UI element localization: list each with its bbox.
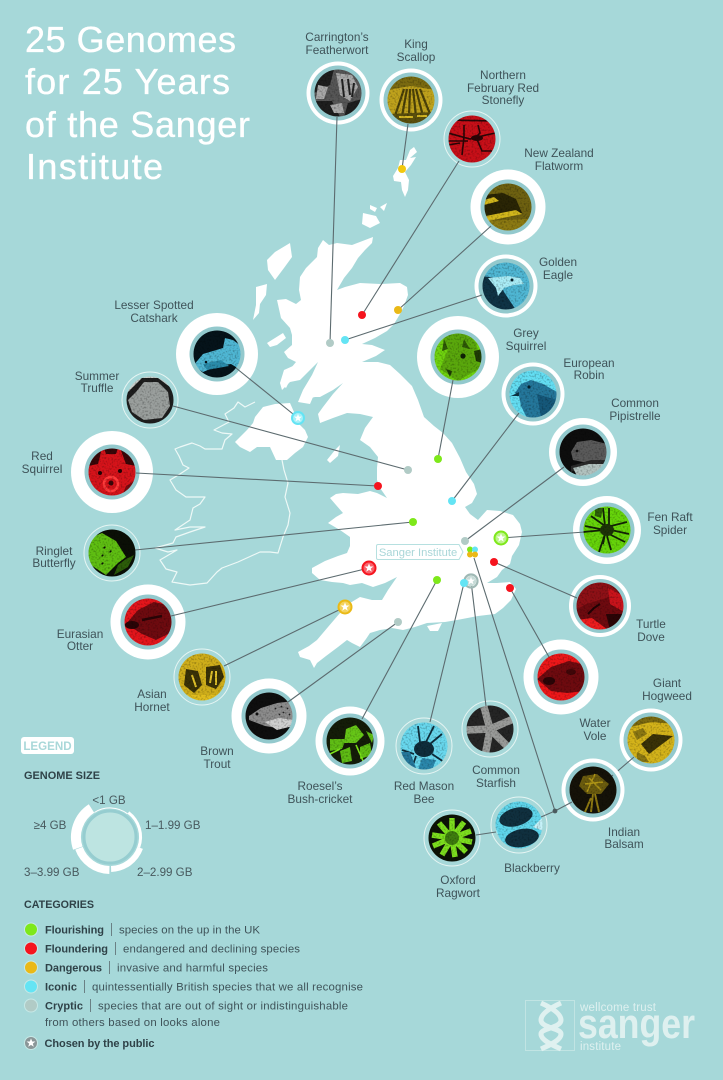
photo: [88, 448, 136, 496]
label: Red Mason: [394, 779, 454, 793]
species: New Zealand Flatworm: [394, 146, 594, 314]
category: dangerous: [24, 961, 268, 974]
species: Eurasian Otter: [57, 560, 376, 660]
genome size labels: [24, 794, 201, 879]
chosen by the public: Chosen by the public: [44, 1038, 154, 1050]
photo: [124, 598, 172, 646]
photo: [245, 692, 293, 740]
legend badge: LEGEND: [23, 740, 72, 753]
genome size labels: 2–2.99 GB: [137, 866, 193, 879]
map: islands: [253, 147, 442, 631]
photo: [88, 529, 136, 577]
heading: categories: CATEGORIES: [24, 899, 94, 911]
label: Robin: [574, 368, 604, 382]
photo: [466, 705, 514, 753]
logo text: sanger: [578, 1000, 695, 1047]
label: Ringlet: [36, 544, 73, 558]
Sanger Institute tag: Sanger Institute: [379, 547, 457, 559]
label: Common: [611, 396, 659, 410]
category: flourishing: [24, 923, 260, 936]
photo: [537, 653, 585, 701]
title: of the Sanger: [25, 104, 250, 145]
label: Brown: [200, 744, 234, 758]
label: Asian: [137, 687, 167, 701]
label: Summer: [75, 369, 119, 383]
photo: [193, 330, 241, 378]
category: cryptic: from others based on looks alone: [45, 1017, 220, 1029]
genome size labels: <1 GB: [92, 794, 126, 807]
species: European Robin: [448, 356, 615, 505]
label: Dove: [637, 630, 665, 644]
species: Ringlet Butterfly: [32, 518, 417, 581]
label: Squirrel: [506, 339, 546, 353]
label: Giant: [653, 676, 682, 690]
map: Northern Ireland: [235, 403, 308, 460]
label: Starfish: [476, 776, 516, 790]
species: Lesser Spotted Catshark: [114, 298, 305, 425]
photo: [434, 333, 482, 381]
species: Golden Eagle: [341, 254, 577, 344]
label: Featherwort: [306, 43, 369, 57]
category: flourishing: Flourishing: [45, 924, 104, 936]
category: iconic: Iconic: [45, 982, 77, 994]
label: Golden: [539, 255, 577, 269]
label: Water: [579, 716, 611, 730]
label: Eurasian: [57, 627, 103, 641]
map of UK and Ireland: [155, 147, 522, 668]
label: Common: [472, 763, 520, 777]
label: Hogweed: [642, 689, 692, 703]
species: Asian Hornet: [134, 600, 352, 714]
species: Indian Balsam: [555, 758, 644, 851]
species: King Scallop: [380, 37, 442, 173]
label: European: [563, 356, 615, 370]
title: Institute: [26, 146, 163, 187]
category: floundering: endangered and declining species: [123, 944, 300, 956]
species: Northern February Red Stonefly: [358, 68, 539, 319]
species: Turtle Dove: [490, 558, 666, 644]
heading: genome size: GENOME SIZE: [24, 770, 100, 782]
label: Eagle: [543, 268, 574, 282]
photo: [509, 370, 557, 418]
label: Northern: [480, 68, 526, 82]
photo: [400, 722, 448, 770]
species: Carrington's Featherwort: [305, 30, 370, 347]
photo: [126, 376, 174, 424]
label: Hornet: [134, 700, 170, 714]
label: Blackberry: [504, 861, 560, 875]
photo: [326, 717, 374, 765]
genome size labels: 1–1.99 GB: [145, 819, 201, 832]
label: Vole: [584, 729, 607, 743]
title: for 25 Years: [25, 61, 230, 102]
species: Common Starfish: [462, 574, 520, 790]
photo: [482, 262, 530, 310]
label: Roesel’s: [297, 779, 343, 793]
category: floundering: [24, 942, 300, 956]
photo: [576, 582, 624, 630]
species: Blackberry: [474, 558, 560, 875]
category: floundering: Floundering: [45, 944, 108, 956]
logo text: institute: [580, 1041, 621, 1053]
map: Ireland outline: [155, 402, 290, 585]
label: Bee: [414, 792, 435, 806]
legend badge: [21, 737, 74, 754]
category: cryptic: [24, 999, 348, 1029]
photo: [569, 766, 617, 814]
label: Stonefly: [482, 93, 524, 107]
species: Oxford Ragwort: [424, 810, 496, 900]
logo: Wellcome Trust Sanger Institute: [526, 1000, 695, 1053]
genome size labels: 3–3.99 GB: [24, 866, 80, 879]
label: Red: [31, 449, 53, 463]
label: Catshark: [130, 311, 178, 325]
label: Carrington’s: [305, 30, 369, 44]
label: Ragwort: [436, 886, 481, 900]
legend: [21, 737, 363, 1050]
label: Otter: [67, 639, 93, 653]
label: New Zealand: [524, 146, 594, 160]
multi-species marker cluster at Sanger: [467, 546, 478, 558]
species: Common Pipistrelle: [461, 396, 661, 545]
label: Trout: [203, 757, 231, 771]
label: Lesser Spotted: [114, 298, 194, 312]
photo: [583, 506, 631, 554]
category: flourishing: species on the up in the UK: [119, 924, 260, 936]
label: Squirrel: [22, 462, 62, 476]
photo: [627, 716, 675, 764]
label: Turtle: [636, 617, 666, 631]
photo: [559, 428, 607, 476]
label: Pipistrelle: [609, 409, 661, 423]
label: Flatworm: [535, 159, 583, 173]
label: Spider: [653, 523, 687, 537]
label: Oxford: [440, 873, 476, 887]
logo text: wellcome trust: [579, 1002, 657, 1014]
genome size labels: ≥4 GB: [34, 819, 67, 832]
label: Indian: [608, 825, 640, 839]
label: Balsam: [604, 837, 644, 851]
genome size ring diagram: [76, 808, 141, 870]
photo: [448, 115, 496, 163]
category: iconic: quintessentially British species that we all recognise: [92, 982, 363, 994]
photo: [495, 801, 543, 850]
category: dangerous: invasive and harmful species: [117, 962, 268, 974]
label: Fen Raft: [647, 510, 693, 524]
species: Brown Trout: [200, 618, 402, 771]
category: cryptic: species that are out of sight or indistinguishable: [98, 1000, 348, 1012]
species: Red Mason Bee: [394, 579, 468, 806]
species: Summer Truffle: [75, 369, 412, 474]
photo: [428, 814, 476, 862]
photo: [314, 69, 362, 117]
species: Roesel's Bush-cricket: [288, 576, 441, 806]
species: Red Squirrel: [22, 431, 382, 513]
photo: [387, 76, 435, 124]
species: Grey Squirrel: [417, 316, 546, 463]
photo: [178, 653, 226, 701]
species: Water Vole: [506, 584, 611, 743]
label: Grey: [513, 326, 539, 340]
title: [25, 19, 250, 187]
map: Great Britain: [277, 237, 522, 668]
species: Giant Hogweed: [618, 678, 692, 772]
photo: [484, 183, 532, 231]
label: King: [404, 37, 428, 51]
logo box and DNA helix: [526, 1000, 574, 1050]
label: Bush-cricket: [288, 792, 353, 806]
category: dangerous: Dangerous: [45, 962, 102, 974]
label: Truffle: [81, 381, 114, 395]
label: Butterfly: [32, 556, 76, 570]
label: February Red: [467, 81, 539, 95]
category: cryptic: Cryptic: [45, 1000, 83, 1012]
label: Scallop: [397, 50, 436, 64]
title: 25 Genomes: [25, 19, 236, 60]
species: Fen Raft Spider: [494, 496, 693, 564]
